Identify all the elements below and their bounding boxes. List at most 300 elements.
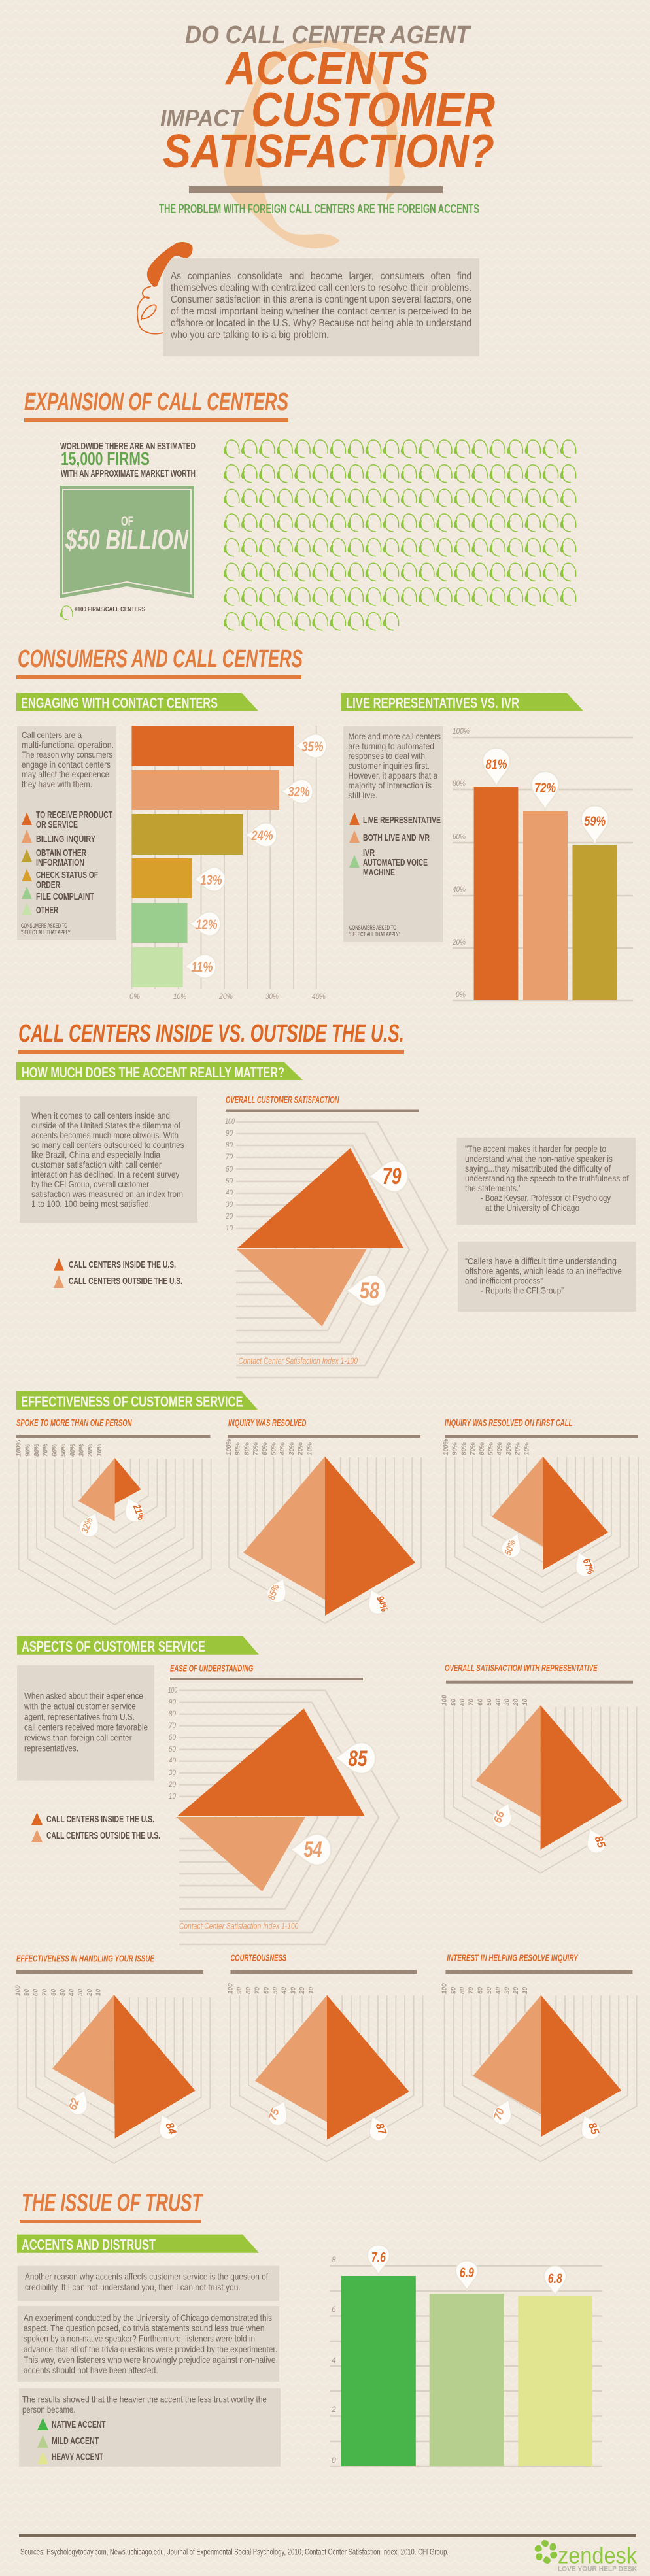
scale labels: 50: [226, 1176, 233, 1185]
legend: OBTAIN OTHER: [36, 847, 86, 858]
panel: experiment: [18, 2306, 279, 2382]
quote: CFI Group: “Callers have a difficult time understanding: [465, 1256, 617, 1266]
title: ACCENTS: [224, 42, 429, 95]
chart: interest in helping resolve inquiry: 30: [504, 1986, 511, 1994]
scale labels: [168, 1686, 177, 1801]
scale labels: 30: [169, 1768, 176, 1777]
legend: ORDER: [36, 879, 60, 890]
chart: spoke to more than one person: 30%: [78, 1444, 85, 1457]
legend: MILD ACCENT: [52, 2435, 99, 2447]
scale labels: 70: [226, 1152, 233, 1161]
caption: Contact Center Satisfaction Index 1-100: [179, 1921, 299, 1931]
panel: accent explanation: so many call centers outsourced to countries: [31, 1140, 184, 1150]
scale labels: 60: [226, 1164, 233, 1174]
text block: customer inquiries first.: [348, 760, 430, 771]
intro text: of the most important being whether the contact center is perceived to be: [171, 306, 471, 317]
chart: overall satisfaction with representative: 50: [486, 1698, 493, 1706]
legend: inside and outside the U.S.: CALL CENTERS OUTSIDE THE U.S.: [69, 1276, 182, 1287]
bar chart: engaging with contact centers: [129, 726, 326, 1001]
chart: overall satisfaction with representative: 60: [477, 1698, 484, 1706]
panel: experiment: accents should not have been affected.: [24, 2365, 158, 2375]
chart: effectiveness in handling your issue: 90: [24, 1988, 31, 1996]
chart: interest in helping resolve inquiry: 70: [468, 1986, 475, 1994]
chart: inquiry was resolved on first call: 60%: [479, 1442, 486, 1455]
chart title: overall customer satisfaction: OVERALL CUSTOMER SATISFACTION: [226, 1094, 339, 1106]
chart: inquiry was resolved on first call: 20%: [515, 1442, 522, 1456]
heading: expansion of call centers: EXPANSION OF CALL CENTERS: [24, 388, 288, 416]
chart: inquiry was resolved: 80%: [243, 1442, 250, 1455]
axis labels: 2: [331, 2405, 336, 2414]
panel: aspects explanation: When asked about their experience: [24, 1690, 143, 1701]
value callouts: [184, 734, 326, 978]
chart: effectiveness in handling your issue: 20: [86, 1988, 94, 1997]
legend: [37, 2418, 106, 2464]
legend: inside and outside the U.S.: CALL CENTERS OUTSIDE THE U.S.: [46, 1830, 160, 1841]
ribbon: effectiveness of customer service: [16, 1391, 258, 1410]
axis labels: 30%: [265, 992, 279, 1001]
banner: $50 billion: OF: [121, 514, 133, 529]
value callouts: 81%: [485, 757, 507, 772]
chart: inquiry was resolved: 10%: [306, 1442, 313, 1455]
heading: call centers inside vs outside the U.S.: [18, 1020, 404, 1054]
icon grid: 150 headsets: [224, 440, 576, 630]
quote: CFI Group: offshore agents, which leads to an ineffective: [465, 1266, 622, 1276]
legend: inside and outside the U.S.: CALL CENTERS INSIDE THE U.S.: [69, 1259, 176, 1270]
value callouts: 35%: [302, 739, 324, 754]
subtitle: THE PROBLEM WITH FOREIGN CALL CENTERS ARE THE FOREIGN ACCENTS: [159, 201, 479, 216]
axis labels: 0: [332, 2456, 336, 2465]
chart: overall satisfaction with representative: 85: [592, 1834, 608, 1850]
panel: accent explanation: accents becomes much more obvious. With: [31, 1130, 179, 1140]
chart: overall satisfaction with representative: 70: [468, 1698, 475, 1706]
chart: inquiry was resolved on first call: 90%: [452, 1442, 459, 1455]
chart: spoke to more than one person: SPOKE TO MORE THAN ONE PERSON: [16, 1417, 132, 1429]
legend: CHECK STATUS OF: [36, 870, 98, 881]
scale labels: 30: [226, 1200, 233, 1209]
panel: results and legend: person became.: [22, 2404, 75, 2415]
axis labels: 6: [332, 2305, 336, 2314]
banner: $50 billion: [60, 486, 194, 598]
ribbon: live representatives vs IVR: LIVE REPRESENTATIVES VS. IVR: [346, 694, 519, 711]
legend: inside and outside the U.S.: [54, 1258, 182, 1288]
chart: courteousness: 87: [373, 2121, 389, 2137]
ribbon: how much does the accent really matter: HOW MUCH DOES THE ACCENT REALLY MATTER?: [22, 1064, 284, 1081]
panel: accent explanation: customer satisfaction with call center: [31, 1159, 162, 1170]
chart: effectiveness in handling your issue: 70: [41, 1988, 48, 1996]
chart: spoke to more than one person: 60%: [51, 1444, 58, 1457]
text block: worldwide firms: WITH AN APPROXIMATE MARKET WORTH: [61, 468, 196, 479]
value callouts: [368, 2245, 566, 2296]
chart title: ease of understanding: EASE OF UNDERSTANDING: [170, 1663, 254, 1674]
panel: accent explanation: 1 to 100. 100 being most satisfied.: [31, 1198, 151, 1209]
axis labels: [331, 2255, 336, 2465]
title: DO CALL CENTER AGENT: [185, 22, 471, 49]
bar chart: live representatives vs IVR: [452, 726, 633, 1000]
intro text: who you are talking to is a big problem.: [170, 330, 329, 341]
chart: interest in helping resolve inquiry: 60: [477, 1986, 484, 1994]
chart: effectiveness in handling your issue: 100: [14, 1985, 22, 1996]
icon: large headset behind title: [224, 40, 405, 248]
text block: However, it appears that a: [348, 770, 437, 781]
chart: spoke to more than one person: [16, 1417, 211, 1625]
legend: IVR: [363, 847, 375, 858]
footnote: [349, 924, 400, 938]
value callout: 58: [345, 1275, 386, 1306]
ribbon: engaging with contact centers: ENGAGING WITH CONTACT CENTERS: [21, 694, 218, 711]
bar chart: trust by accent: [330, 2245, 602, 2466]
chart: inquiry was resolved on first call: 80%: [460, 1442, 468, 1455]
scale labels: 100: [168, 1686, 177, 1695]
panel: experiment: An experiment conducted by the University of Chicago demonstrated this: [24, 2313, 272, 2323]
quote: Boaz Keysar: at the University of Chicago: [485, 1202, 579, 1213]
footer rule: [19, 2534, 636, 2537]
text block: [22, 730, 114, 789]
value callouts: 6.9: [460, 2265, 474, 2280]
value callouts: 12%: [196, 917, 218, 932]
chart: spoke to more than one person: 32%: [79, 1516, 95, 1534]
chart: inquiry was resolved on first call: 70%: [470, 1442, 477, 1455]
chart: inquiry was resolved: 100%: [226, 1438, 233, 1455]
legend: OTHER: [36, 905, 58, 916]
intro text: As companies consolidate and become larger, consumers often find: [171, 271, 471, 282]
panel: live vs IVR explanation and legend: [343, 726, 443, 942]
axis labels: [452, 726, 470, 999]
banner: $50 billion: $50 BILLION: [65, 524, 189, 556]
chart: courteousness: 80: [245, 1986, 252, 1994]
text block: may affect the experience: [22, 769, 109, 779]
chart: inquiry was resolved: 94%: [374, 1595, 390, 1613]
scale labels: 50: [169, 1744, 176, 1754]
chart: effectiveness in handling your issue: 80: [33, 1988, 40, 1996]
chart title: ease of understanding: [170, 1663, 363, 1680]
legend: [22, 809, 112, 916]
quote: Boaz Keysar: "The accent makes it harder for people to: [465, 1144, 606, 1154]
value callouts: 7.6: [371, 2250, 386, 2265]
title: IMPACT: [160, 105, 245, 131]
panel: results and legend: [19, 2388, 281, 2467]
value callouts: [483, 748, 609, 845]
legend: BILLING INQUIRY: [36, 834, 95, 845]
scale labels: 10: [226, 1223, 233, 1232]
intro text: Consumer satisfaction in this arena is contingent upon several factors, one: [171, 294, 471, 305]
chart: interest in helping resolve inquiry: 40: [495, 1986, 502, 1995]
legend: inside and outside the U.S.: CALL CENTERS INSIDE THE U.S.: [46, 1814, 154, 1825]
text block: Call centers are a: [22, 730, 82, 740]
legend: AUTOMATED VOICE: [363, 857, 428, 868]
scale labels: 10: [169, 1791, 176, 1801]
quote: Boaz Keysar: saying...they misattributed the difficulty of: [465, 1163, 611, 1174]
heading: consumers and call centers: CONSUMERS AND CALL CENTERS: [18, 645, 303, 673]
footnote: CONSUMERS ASKED TO: [21, 923, 67, 930]
text block: worldwide firms: [60, 441, 196, 479]
chart: courteousness: 100: [228, 1983, 234, 1994]
quote: Boaz Keysar: [456, 1138, 636, 1225]
chart: inquiry was resolved: 30%: [288, 1442, 296, 1455]
text block: they have with them.: [22, 779, 92, 789]
chart: interest in helping resolve inquiry: [441, 1952, 637, 2161]
panel: accent explanation: outside of the United States the dilemma of: [31, 1120, 180, 1130]
chart: courteousness: 90: [236, 1986, 243, 1994]
axis labels: 40%: [312, 992, 326, 1001]
panel: experiment: spoken by a non-native speaker? Furthermore, listeners were told in: [24, 2333, 255, 2344]
footnote: [21, 923, 71, 936]
chart: interest in helping resolve inquiry: 10: [522, 1986, 529, 1994]
quote: Boaz Keysar: the statements.": [465, 1183, 522, 1193]
panel: accent explanation: by the CFI Group, overall customer: [31, 1179, 149, 1189]
ribbon: accents and distrust: ACCENTS AND DISTRUST: [22, 2236, 156, 2253]
value callout: 85: 85: [348, 1746, 368, 1771]
heading: call centers inside vs outside the U.S.: CALL CENTERS INSIDE VS. OUTSIDE THE U.S.: [18, 1020, 404, 1047]
caption: Contact Center Satisfaction Index 1-100: [238, 1355, 358, 1366]
chart: inquiry was resolved on first call: INQUIRY WAS RESOLVED ON FIRST CALL: [445, 1417, 573, 1429]
text block: worldwide firms: 15,000 FIRMS: [61, 449, 150, 469]
chart: inquiry was resolved: 40%: [279, 1442, 286, 1456]
scale labels: 60: [169, 1733, 176, 1742]
chart: spoke to more than one person: 10%: [96, 1444, 103, 1457]
heading: consumers and call centers: [16, 645, 303, 679]
heading: expansion of call centers: [24, 388, 288, 422]
intro text: themselves dealing with centralized call centers to resolve their problems.: [171, 282, 471, 294]
chart: effectiveness in handling your issue: [14, 1954, 210, 2163]
axis labels: 40%: [453, 885, 466, 894]
chart: courteousness: 75: [266, 2107, 282, 2122]
title: CUSTOMER: [251, 84, 495, 137]
value callouts: 59%: [584, 814, 606, 829]
axis labels: [129, 992, 326, 1001]
axis labels: 4: [332, 2356, 336, 2365]
text block: worldwide firms: WORLDWIDE THERE ARE AN ESTIMATED: [60, 441, 196, 452]
chart: courteousness: 50: [272, 1986, 279, 1994]
chart: effectiveness in handling your issue: 62: [66, 2096, 82, 2112]
value callouts: 24%: [251, 828, 273, 843]
chart: overall satisfaction with representative: [441, 1663, 637, 1873]
chart: spoke to more than one person: 70%: [43, 1444, 50, 1457]
legend: TO RECEIVE PRODUCT: [36, 809, 112, 821]
value callout: 85: [334, 1742, 375, 1774]
chart: courteousness: [228, 1952, 422, 2161]
chart: interest in helping resolve inquiry: 100: [441, 1983, 449, 1994]
legend: MACHINE: [363, 867, 395, 878]
legend: LIVE REPRESENTATIVE: [363, 815, 441, 826]
text block: [348, 731, 441, 800]
chart: spoke to more than one person: 21%: [131, 1502, 146, 1521]
value callout: 79: 79: [382, 1164, 402, 1189]
legend: BOTH LIVE AND IVR: [363, 832, 430, 843]
chart: spoke to more than one person: 20%: [87, 1444, 94, 1457]
chart: inquiry was resolved: [226, 1417, 421, 1623]
quote: Boaz Keysar: - Boaz Keysar, Professor of Psychology: [481, 1193, 611, 1203]
text block: majority of interaction is: [348, 780, 432, 790]
legend: HEAVY ACCENT: [52, 2451, 103, 2462]
chart: inquiry was resolved: 60%: [262, 1442, 269, 1455]
quote: CFI Group: - Reports the CFI Group”: [481, 1285, 564, 1296]
text block: engage in contact centers: [22, 759, 111, 770]
text block: The reason why consumers: [22, 749, 112, 760]
legend: FILE COMPLAINT: [36, 891, 94, 902]
footnote: CONSUMERS ASKED TO: [349, 924, 396, 932]
scale labels: 70: [169, 1721, 176, 1730]
chart: spoke to more than one person: 40%: [69, 1444, 77, 1457]
panel: accent explanation: [20, 1096, 197, 1223]
title: SATISFACTION?: [163, 126, 494, 178]
panel: experiment: advance that all of the trivia questions were provided by the experimenter.: [24, 2344, 277, 2354]
radar chart: ease of understanding: [168, 1686, 399, 1944]
heading: the issue of trust: [20, 2189, 203, 2223]
title: [160, 22, 495, 178]
quote: CFI Group: and inefficient process”: [465, 1276, 543, 1286]
intro text: offshore or located in the U.S. Why? Because not being able to understand: [171, 318, 471, 329]
chart: effectiveness in handling your issue: 30: [77, 1988, 84, 1996]
chart: courteousness: 10: [308, 1986, 315, 1994]
chart: inquiry was resolved: 50%: [271, 1442, 277, 1455]
chart: overall satisfaction with representative: 90: [450, 1698, 457, 1706]
chart title: overall customer satisfaction: [226, 1094, 419, 1112]
scale labels: 20: [225, 1212, 233, 1221]
ribbon: effectiveness of customer service: EFFECTIVENESS OF CUSTOMER SERVICE: [21, 1393, 243, 1410]
chart: effectiveness in handling your issue: 10: [95, 1988, 103, 1996]
logo: zendesk: LOVE YOUR HELP DESK: [558, 2566, 637, 2573]
chart: overall satisfaction with representative: 100: [441, 1695, 449, 1706]
scale labels: [225, 1117, 235, 1232]
chart: courteousness: 60: [263, 1986, 270, 1994]
title divider bar: [189, 186, 443, 193]
scale labels: 40: [169, 1756, 176, 1765]
chart: spoke to more than one person: 100%: [16, 1440, 23, 1457]
quote: CFI Group: [458, 1242, 636, 1312]
chart: inquiry was resolved on first call: 100%: [443, 1438, 450, 1455]
radar chart: overall customer satisfaction: [225, 1117, 448, 1378]
text block: are turning to automated: [348, 741, 434, 751]
chart: inquiry was resolved: 20%: [298, 1442, 305, 1456]
chart: courteousness: 30: [290, 1986, 297, 1994]
scale labels: 80: [226, 1140, 233, 1149]
footnote: 'SELECT ALL THAT APPLY': [21, 929, 71, 936]
chart: inquiry was resolved on first call: 50%: [488, 1442, 494, 1455]
axis labels: 20%: [218, 992, 233, 1001]
chart: inquiry was resolved on first call: 30%: [505, 1442, 513, 1455]
axis labels: 80%: [453, 779, 466, 788]
chart: interest in helping resolve inquiry: 20: [513, 1986, 520, 1995]
value callouts: 11%: [191, 960, 213, 975]
chart: inquiry was resolved on first call: 67%: [580, 1557, 596, 1576]
panel: aspects explanation: [17, 1665, 154, 1781]
intro text: [170, 271, 471, 341]
chart: interest in helping resolve inquiry: 70: [491, 2106, 507, 2122]
scale labels: 90: [169, 1697, 176, 1706]
scale labels: 80: [169, 1709, 176, 1718]
text block: multi-functional operation.: [22, 739, 114, 750]
axis labels: 0%: [456, 990, 466, 999]
value callouts: 72%: [534, 781, 556, 796]
value callout: 58: 58: [360, 1278, 379, 1304]
chart: effectiveness in handling your issue: EFFECTIVENESS IN HANDLING YOUR ISSUE: [16, 1954, 155, 1965]
logo: zendesk: [534, 2540, 637, 2573]
scale labels: 20: [168, 1780, 176, 1789]
ribbon: aspects of customer service: ASPECTS OF CUSTOMER SERVICE: [22, 1638, 205, 1655]
value callout: 54: [289, 1834, 331, 1865]
axis labels: 100%: [453, 726, 470, 736]
legend: [349, 812, 441, 878]
chart: overall satisfaction with representative: 66: [491, 1809, 507, 1825]
legend: headset equals 100 firms: [60, 605, 145, 620]
chart: courteousness: 20: [299, 1986, 306, 1995]
axis labels: 0%: [129, 992, 140, 1001]
value callouts: 13%: [200, 873, 222, 888]
legend: INFORMATION: [36, 857, 84, 868]
scale labels: 90: [226, 1128, 233, 1138]
chart: interest in helping resolve inquiry: INTEREST IN HELPING RESOLVE INQUIRY: [447, 1952, 579, 1963]
chart: overall satisfaction with representative: 20: [513, 1698, 520, 1706]
panel: introduction: [163, 258, 479, 356]
panel: contact centers explanation and legend: [17, 726, 116, 940]
chart: inquiry was resolved: 85%: [266, 1583, 282, 1601]
legend: NATIVE ACCENT: [52, 2419, 106, 2430]
chart: interest in helping resolve inquiry: 80: [459, 1986, 466, 1994]
chart: inquiry was resolved: INQUIRY WAS RESOLVED: [228, 1417, 307, 1429]
panel: aspects explanation: call centers received more favorable: [24, 1721, 148, 1732]
chart: courteousness: 40: [281, 1986, 288, 1995]
text block: responses to deal with: [348, 751, 425, 761]
panel: aspects explanation: agent, representatives from U.S.: [24, 1711, 135, 1721]
chart: effectiveness in handling your issue: 84: [163, 2121, 179, 2137]
panel: credibility: Another reason why accents affects customer service is the question of: [25, 2271, 268, 2282]
panel: accent explanation: satisfaction was measured on an index from: [31, 1189, 183, 1199]
scale labels: 100: [225, 1117, 235, 1126]
chart: inquiry was resolved on first call: [443, 1417, 638, 1623]
chart: effectiveness in handling your issue: 50: [60, 1988, 67, 1996]
sources: Sources: Psychologytoday.com, News.uchicago.edu, Journal of Experimental Social Psychology, 2010, Contact Center Satisfaction Index, 2010. CFI Group.: [20, 2547, 449, 2556]
chart: interest in helping resolve inquiry: 50: [486, 1986, 493, 1994]
legend: inside and outside the U.S.: [31, 1812, 160, 1842]
panel: aspects explanation: representatives.: [24, 1742, 78, 1753]
chart: effectiveness in handling your issue: 60: [50, 1988, 58, 1996]
chart: spoke to more than one person: 80%: [33, 1444, 41, 1457]
value callout: 79: [368, 1161, 408, 1192]
icon: telephone handset: [137, 242, 193, 334]
text block: still live.: [348, 790, 377, 800]
chart: overall satisfaction with representative: 10: [522, 1698, 529, 1706]
panel: accent explanation: interaction has declined. In a recent survey: [31, 1169, 179, 1179]
scale labels: 40: [226, 1188, 233, 1197]
chart: spoke to more than one person: 50%: [60, 1444, 67, 1457]
chart: inquiry was resolved: 90%: [235, 1442, 242, 1455]
chart: inquiry was resolved on first call: 50%: [502, 1538, 519, 1557]
chart: courteousness: 70: [254, 1986, 262, 1994]
chart: effectiveness in handling your issue: 40: [68, 1988, 76, 1997]
chart: overall satisfaction with representative: 30: [504, 1698, 511, 1706]
ribbon: how much does the accent really matter: [16, 1062, 303, 1081]
value callout: 54: 54: [304, 1837, 322, 1862]
chart: interest in helping resolve inquiry: 85: [586, 2121, 602, 2137]
panel: accent explanation: like Brazil, China and especially India: [31, 1149, 160, 1160]
chart: overall satisfaction with representative: 80: [459, 1698, 466, 1706]
logo: zendesk: zendesk: [558, 2543, 637, 2569]
chart: spoke to more than one person: 90%: [24, 1444, 31, 1457]
heading: the issue of trust: THE ISSUE OF TRUST: [22, 2189, 203, 2216]
legend: OR SERVICE: [36, 819, 78, 830]
panel: accent explanation: When it comes to call centers inside and: [31, 1110, 170, 1121]
text block: More and more call centers: [348, 731, 441, 741]
chart: inquiry was resolved on first call: 40%: [496, 1442, 504, 1456]
panel: credibility: credibility. If I can not understand you, then I can not trust you.: [25, 2282, 241, 2292]
value callouts: 32%: [288, 785, 310, 800]
panel: experiment: This way, even listeners who were knowingly prejudice against non-native: [24, 2354, 276, 2365]
quote: Boaz Keysar: understand what the non-native speaker is: [465, 1153, 613, 1164]
panel: aspects explanation: reviews than foreign call center: [24, 1732, 132, 1742]
chart: inquiry was resolved: 70%: [252, 1442, 260, 1455]
value callouts: 6.8: [548, 2271, 562, 2286]
chart: interest in helping resolve inquiry: 90: [450, 1986, 457, 1994]
